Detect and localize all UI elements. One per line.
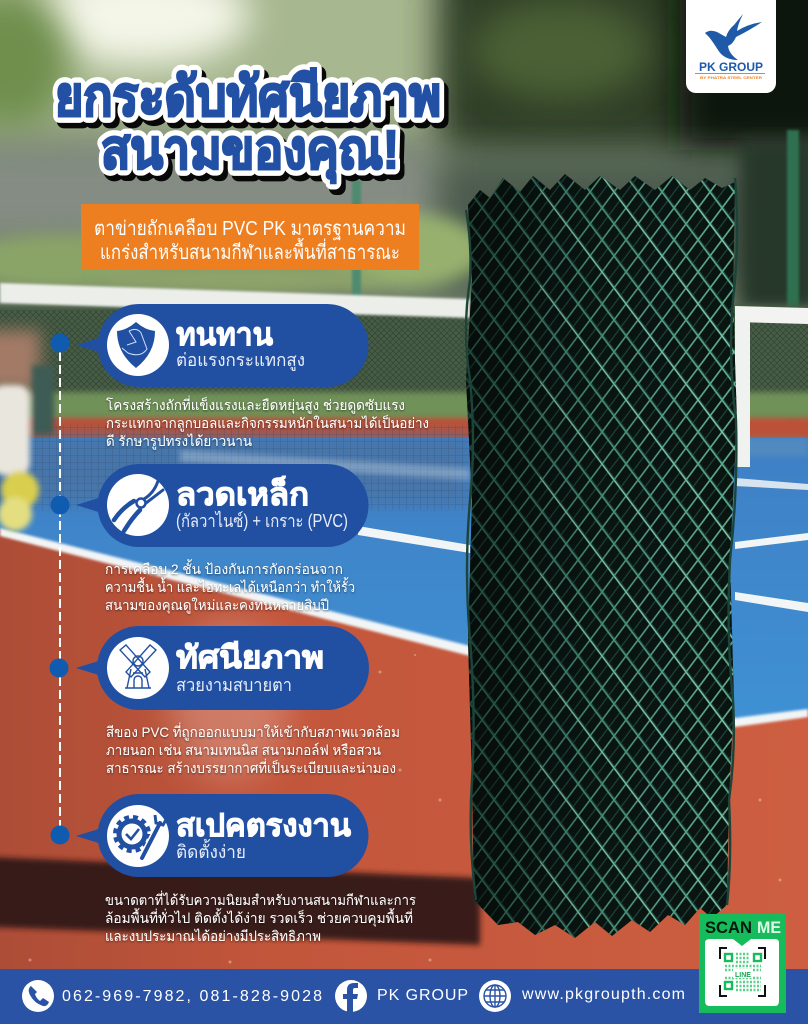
description 4: ล้อมพื้นที่ทั่วไป ติดตั้งได้ง่าย รวดเร็ว ช่วยควบคุมพื้นที่ [105, 908, 413, 927]
icon: globe [479, 980, 511, 1012]
wire mesh roll [460, 170, 740, 940]
heading 2: ลวดเหล็ก [176, 475, 309, 512]
heading 1: ทนทาน [176, 317, 273, 352]
description 3 [106, 723, 400, 776]
description 2: สนามของคุณดูใหม่และคงทนหลายสิบปี [105, 597, 329, 614]
description 1: ดี รักษารูปทรงได้ยาวนาน [106, 433, 252, 450]
website: www.pkgroupth.com [521, 986, 685, 1003]
background: blurred trees and fence [0, 0, 808, 420]
timeline dot 3 [50, 658, 68, 678]
title: สนามของคุณ! [101, 120, 399, 184]
description 2: การเคลือบ 2 ชั้น ป้องกันการกัดกร่อนจาก [105, 559, 343, 577]
description 3: ภายนอก เช่น สนามเทนนิส สนามกอล์ฟ หรือสวน [106, 742, 381, 758]
title: ยกระดับทัศนียภาพ [55, 67, 441, 127]
subtitle banner: แกร่งสำหรับสนามกีฬาและพื้นที่สาธารณะ [100, 238, 400, 264]
description 4: ขนาดตาที่ได้รับความนิยมสำหรับงานสนามกีฬาและการ [105, 891, 416, 908]
description 3: สาธารณะ สร้างบรรยากาศที่เป็นระเบียบและน่ามอง [106, 759, 396, 776]
QR card [699, 914, 786, 1013]
icon: swallow [705, 14, 762, 60]
subheading 2: (กัลวาไนซ์) + เกราะ (PVC) [176, 510, 348, 531]
QR card: ME [757, 919, 781, 937]
background: hedge behind net [0, 305, 808, 442]
subheading 3: สวยงามสบายตา [176, 675, 292, 695]
title: ยกระดับทัศนียภาพ [55, 67, 441, 127]
phone numbers: 062-969-7982, 081-828-9028 [62, 988, 322, 1005]
background: court lines [0, 450, 808, 727]
feature 3 [50, 626, 400, 776]
background: blurred objects at left [0, 365, 54, 531]
icon: shield with arm [107, 314, 169, 376]
QR code: LINE [735, 972, 751, 979]
icon: gear and wrench [107, 805, 169, 867]
description 4 [105, 891, 416, 944]
pill 4 [76, 794, 368, 877]
title: สนามของคุณ! [105, 125, 403, 189]
icon: facebook [335, 980, 367, 1012]
logo card [686, 0, 776, 93]
logo text: PK GROUP [699, 60, 763, 74]
background: net band and post [0, 283, 808, 467]
icon: pliers [107, 474, 169, 536]
scan me label: SCAN [705, 919, 752, 937]
title: ยกระดับทัศนียภาพ [59, 72, 445, 132]
timeline dashed line [59, 352, 61, 826]
heading 3: ทัศนียภาพ [176, 640, 324, 675]
logo tagline: BY PHATRA STEEL CENTER [700, 75, 762, 80]
title: สนามของคุณ! [101, 120, 399, 184]
subheading 1: ต่อแรงกระแทกสูง [176, 350, 305, 371]
feature 1 [50, 304, 429, 450]
description 4: และงบประมาณได้อย่างมีประสิทธิภาพ [105, 928, 321, 944]
title [55, 67, 445, 189]
pill 2 [76, 464, 368, 547]
description 2: ความชื้น น้ำ และไอทะเลได้เหนือกว่า ทำให้รั้ว [105, 577, 355, 595]
pill 1 [76, 304, 368, 387]
icon: windmill [107, 637, 169, 699]
pill 3 [76, 626, 369, 710]
description 1: โครงสร้างถักที่แข็งแรงและยืดหยุ่นสูง ช่วยดูดซับแรง [106, 396, 405, 414]
footer bar [0, 969, 808, 1024]
icon: phone [22, 980, 54, 1012]
subtitle banner: ตาข่ายถักเคลือบ PVC PK มาตรฐานความ [94, 218, 406, 240]
background: blue court [0, 438, 808, 723]
subtitle banner [81, 204, 419, 270]
feature 2 [50, 464, 368, 614]
description 1 [106, 396, 429, 450]
description 3: สีของ PVC ที่ถูกออกแบบมาให้เข้ากับสภาพแวดล้อม [106, 723, 400, 741]
timeline dot 1 [50, 334, 70, 352]
facebook name: PK GROUP [377, 987, 468, 1004]
background: red court speckle [28, 654, 782, 964]
description 1: กระแทกจากลูกบอลและกิจกรรมหนักในสนามได้เป็นอย่าง [106, 414, 429, 432]
description 2 [105, 559, 355, 614]
timeline dot 2 [50, 496, 70, 514]
feature 4 [50, 794, 416, 944]
subheading 4: ติดตั้งง่าย [176, 839, 246, 862]
background: roll shadow on ground [0, 857, 480, 945]
timeline dot 4 [50, 826, 70, 844]
heading 4: สเปคตรงงาน [176, 808, 351, 843]
